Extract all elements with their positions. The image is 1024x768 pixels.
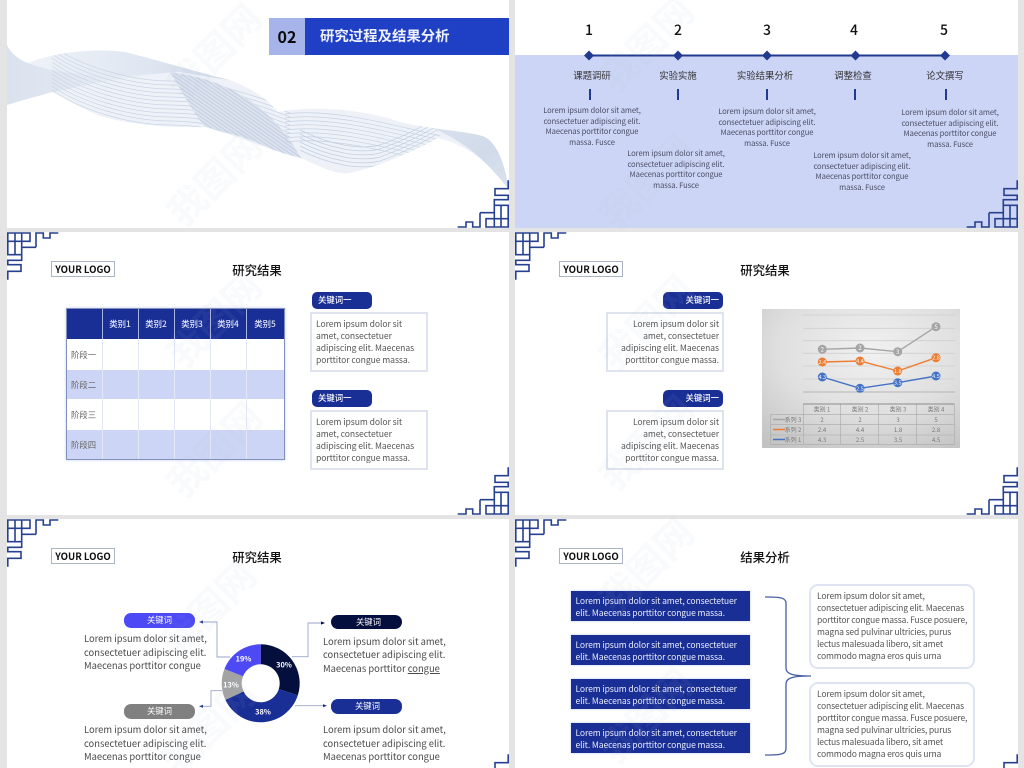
- step 5: Maecenas porttitor congue: [904, 128, 996, 139]
- chart data table labels: 4.5: [932, 435, 940, 444]
- text bar 1: elit. Maecenas porttitor congue massa.: [576, 606, 725, 618]
- step 2: consectetuer adipiscing elit.: [627, 159, 725, 170]
- step 3: Maecenas porttitor congue: [721, 127, 813, 138]
- step 5: consectetuer adipiscing elit.: [901, 118, 999, 129]
- logo: YOUR LOGO: [55, 262, 111, 276]
- text bar 1: Lorem ipsum dolor sit amet, consectetuer: [576, 594, 737, 606]
- heading: 结果分析: [740, 548, 790, 566]
- step 5: 论文撰写: [926, 68, 964, 82]
- series 1 line: [818, 372, 940, 393]
- text bar 2: elit. Maecenas porttitor congue massa.: [576, 650, 725, 662]
- step 4: consectetuer adipiscing elit.: [813, 161, 911, 172]
- series 3 line: 2: [858, 343, 862, 352]
- text bar 3: Lorem ipsum dolor sit amet, consectetuer: [576, 682, 737, 694]
- step 1: massa. Fusce: [569, 137, 615, 148]
- text box 1: adipiscing elit. Maecenas: [621, 342, 719, 354]
- watermarks: 我图网: [147, 547, 266, 666]
- corner ornament: [1003, 754, 1018, 768]
- text box bottom: [809, 682, 975, 767]
- data table: 类别5: [254, 318, 276, 330]
- slide 3: table results: [7, 232, 509, 515]
- text bar 3: [571, 679, 750, 709]
- step 3: consectetuer adipiscing elit.: [718, 117, 816, 128]
- keyword pill: blue: [331, 699, 402, 714]
- series 3 line: 3: [896, 347, 899, 356]
- text box 2: amet, consectetuer: [316, 428, 392, 440]
- text box top: consectetuer adipiscing elit. Maecenas: [817, 602, 964, 614]
- data table: 阶段四: [71, 439, 96, 451]
- series 3 line: 2: [821, 344, 825, 354]
- text box bottom: lectus malesuada libero, sit amet: [817, 736, 943, 748]
- text bar 1: [571, 591, 750, 621]
- text box bottom: consectetuer adipiscing elit. Maecenas: [817, 700, 964, 712]
- corner ornament top left: [515, 232, 566, 280]
- donut chart with connectors: 19%: [236, 654, 251, 665]
- keyword pill 1: [663, 292, 723, 309]
- series 2 line: [818, 353, 940, 376]
- logo: YOUR LOGO: [55, 549, 111, 563]
- step 2: Maecenas porttitor congue: [630, 169, 722, 180]
- text block: blue: [323, 722, 446, 763]
- keyword pill: purple: 关键词: [147, 614, 172, 626]
- keyword pill: gray: [124, 704, 195, 718]
- text bar 4: Lorem ipsum dolor sit amet, consectetuer: [576, 726, 737, 738]
- chart data table labels: 类别 1: [814, 404, 830, 414]
- data table: 阶段三: [71, 408, 96, 420]
- text bar 4: [571, 723, 750, 753]
- section number block: 02: [278, 24, 296, 48]
- data table: 阶段二: [71, 378, 96, 390]
- text block: blue: consectetuer adipiscing elit.: [323, 736, 445, 750]
- slide 4: line chart results: [515, 232, 1018, 515]
- chart data table labels: 4.4: [856, 425, 865, 434]
- keyword pill 1: 关键词一: [318, 294, 352, 306]
- data table: [66, 308, 284, 460]
- series 1 line: 3.5: [894, 379, 902, 387]
- step 5: massa. Fusce: [927, 139, 973, 150]
- keyword pill 1: [312, 292, 372, 309]
- keyword pill 2: [663, 390, 723, 407]
- keyword pill 2: 关键词一: [686, 392, 719, 404]
- keyword pill: blue: 关键词: [355, 700, 380, 712]
- chart data table labels: 4.3: [818, 435, 826, 444]
- step 3: Lorem ipsum dolor sit amet,: [718, 106, 816, 117]
- step 5: [901, 20, 999, 150]
- text block: purple: Lorem ipsum dolor sit amet,: [84, 631, 207, 645]
- step 2: 2: [674, 20, 682, 40]
- chart data table labels: 3.5: [894, 435, 902, 444]
- watermarks: 我图网: [585, 120, 704, 239]
- watermarks: 我图网: [585, 381, 704, 500]
- series 2 line: 2.4: [818, 358, 826, 366]
- text box 1: Lorem ipsum dolor sit: [633, 318, 719, 330]
- text block: blue: Lorem ipsum dolor sit amet,: [323, 722, 446, 736]
- step 4: Maecenas porttitor congue: [816, 171, 908, 182]
- logo: YOUR LOGO: [563, 549, 619, 563]
- timeline axis with diamonds: [584, 50, 950, 60]
- text box top: commodo magna eros quis urna: [817, 650, 941, 662]
- corner ornament: [966, 467, 1018, 515]
- step 1: Maecenas porttitor congue: [546, 126, 638, 137]
- step 3: massa. Fusce: [744, 138, 790, 149]
- keyword pill 1: 关键词一: [686, 294, 719, 306]
- step 2: Lorem ipsum dolor sit amet,: [627, 148, 725, 159]
- text box bottom: magna sed pulvinar ultricies, purus: [817, 724, 951, 736]
- text box 2: adipiscing elit. Maecenas: [316, 440, 414, 452]
- text box 1: Lorem ipsum dolor sit: [316, 318, 402, 330]
- text box top: [809, 584, 975, 669]
- step 4: [813, 20, 911, 193]
- keyword pill 2: [312, 390, 372, 407]
- text block: blue: Maecenas porttitor congue: [323, 749, 440, 763]
- series 2 line: 2.8: [932, 354, 940, 362]
- text box 1: porttitor congue massa.: [625, 354, 719, 366]
- series 3 line: [818, 322, 940, 356]
- text box 2: [606, 410, 724, 470]
- watermarks: 我图网: [585, 261, 704, 380]
- heading: 研究结果: [232, 548, 282, 566]
- keyword pill: purple: [124, 613, 195, 628]
- step 3: [718, 20, 816, 149]
- chart data table labels: [785, 404, 945, 444]
- step 2: massa. Fusce: [653, 180, 699, 191]
- logo: YOUR LOGO: [563, 262, 619, 276]
- text block: navy: Lorem ipsum dolor sit amet,: [323, 634, 446, 648]
- blue background band: [515, 55, 1018, 228]
- text block: navy: consectetuer adipiscing elit.: [323, 647, 445, 661]
- text box bottom: commodo magna eros quis urna: [817, 748, 941, 760]
- chart data table labels: 1.8: [894, 425, 903, 434]
- data table: 类别1: [109, 318, 131, 330]
- watermarks: 我图网: [153, 117, 272, 236]
- section number block: [269, 18, 305, 55]
- chart data table labels: 2: [858, 415, 862, 424]
- text box bottom: Lorem ipsum dolor sit amet,: [817, 688, 925, 700]
- line chart with data table: [762, 309, 960, 448]
- watermarks: 我图网: [585, 504, 704, 623]
- step 4: 4: [850, 20, 858, 40]
- text box top: porttitor congue massa. Fusce posuere,: [817, 614, 967, 626]
- text bar 2: Lorem ipsum dolor sit amet, consectetuer: [576, 638, 737, 650]
- text box 1: amet, consectetuer: [643, 330, 719, 342]
- keyword pill 2: 关键词一: [318, 392, 352, 404]
- text block: purple: [84, 631, 207, 672]
- data table: 类别4: [217, 318, 239, 330]
- donut chart with connectors: 13%: [223, 680, 239, 691]
- series 2 line: 1.8: [894, 367, 902, 375]
- text box bottom: porttitor congue massa. Fusce posuere,: [817, 712, 967, 724]
- section title bar: 研究过程及结果分析: [320, 25, 450, 46]
- chart data table labels: 类别 2: [852, 404, 869, 414]
- keyword pill: gray: 关键词: [147, 705, 172, 717]
- text box top: Lorem ipsum dolor sit amet,: [817, 590, 925, 602]
- text box top: magna sed pulvinar ultricies, purus: [817, 626, 951, 638]
- step 4: Lorem ipsum dolor sit amet,: [813, 150, 911, 161]
- text box 2: Lorem ipsum dolor sit: [316, 416, 402, 428]
- step 4: 调整检查: [834, 68, 872, 82]
- step 1: [543, 20, 641, 148]
- heading: 研究结果: [232, 261, 282, 279]
- step 1: 课题调研: [573, 68, 611, 82]
- corner ornament: [458, 180, 509, 228]
- text box 2: Lorem ipsum dolor sit: [633, 416, 719, 428]
- step 1: Lorem ipsum dolor sit amet,: [543, 105, 641, 116]
- text block: gray: [84, 722, 207, 763]
- text box 2: porttitor congue massa.: [625, 452, 719, 464]
- heading: 研究结果: [740, 261, 790, 279]
- slide 6: result analysis: [515, 519, 1018, 768]
- series 1 line: 4.3: [818, 373, 826, 381]
- corner ornament top left: [7, 519, 58, 567]
- donut chart with connectors: 38%: [255, 707, 271, 718]
- series 2 line: 4.4: [856, 357, 864, 365]
- step 4: massa. Fusce: [839, 182, 885, 193]
- step 5: Lorem ipsum dolor sit amet,: [901, 107, 999, 118]
- text block: gray: Maecenas porttitor congue: [84, 749, 201, 763]
- series 3 line: 5: [934, 322, 938, 331]
- text block: purple: consectetuer adipiscing elit.: [84, 644, 206, 658]
- series 1 line: 4.5: [932, 372, 940, 380]
- corner ornament: [494, 754, 509, 768]
- text block: gray: consectetuer adipiscing elit.: [84, 736, 206, 750]
- series 1 line: 2.5: [856, 384, 864, 392]
- donut chart with connectors: [199, 620, 327, 722]
- slide 5: donut results: [7, 519, 509, 768]
- data table: 类别2: [145, 318, 167, 330]
- step 3: 3: [763, 20, 771, 40]
- corner ornament top left: [7, 232, 58, 280]
- text block: purple: Maecenas porttitor congue: [84, 658, 201, 672]
- text box 2: amet, consectetuer: [643, 428, 719, 440]
- data table: 类别3: [181, 318, 203, 330]
- chart data table labels: 类别 4: [928, 404, 945, 414]
- text box 1: amet, consectetuer: [316, 330, 392, 342]
- text box 1: [606, 312, 724, 372]
- chart data table labels: 5: [934, 415, 938, 424]
- chart data table labels: 系列 1: [785, 435, 801, 444]
- text box 2: adipiscing elit. Maecenas: [621, 440, 719, 452]
- donut chart with connectors: 30%: [276, 660, 292, 671]
- text box top: lectus malesuada libero, sit amet: [817, 638, 943, 650]
- text box 1: porttitor congue massa.: [316, 354, 410, 366]
- keyword pill: navy: 关键词: [356, 616, 381, 628]
- text box 2: porttitor congue massa.: [316, 452, 410, 464]
- slide 1: section cover: [7, 0, 509, 228]
- corner ornament: [458, 467, 509, 515]
- text bar 3: elit. Maecenas porttitor congue massa.: [576, 694, 725, 706]
- chart data table labels: 2: [820, 415, 824, 424]
- step 2: [627, 20, 725, 191]
- watermarks: 我图网: [153, 388, 272, 507]
- chart data table labels: 系列 3: [785, 415, 801, 424]
- watermarks: 我图网: [153, 258, 272, 377]
- brace connector: [765, 596, 811, 756]
- chart data table labels: 3: [896, 415, 900, 424]
- chart data table labels: 2.5: [856, 435, 864, 444]
- step 2: 实验实施: [659, 68, 697, 82]
- corner ornament: [966, 180, 1018, 228]
- text bar 2: [571, 635, 750, 665]
- text block: navy: Maecenas porttitor congue: [323, 660, 440, 674]
- text block: gray: Lorem ipsum dolor sit amet,: [84, 722, 207, 736]
- text box 1: [310, 312, 428, 372]
- text bar 4: elit. Maecenas porttitor congue massa.: [576, 738, 725, 750]
- chart data table labels: 2.8: [932, 425, 941, 434]
- step 3: 实验结果分析: [737, 68, 793, 82]
- section title bar: [305, 18, 509, 55]
- keyword pill: navy: [331, 614, 402, 629]
- chart data table labels: 类别 3: [890, 404, 906, 414]
- step 1: consectetuer adipiscing elit.: [543, 116, 641, 127]
- slide 2: timeline: [515, 0, 1018, 228]
- corner ornament top left: [515, 519, 566, 567]
- text box 1: adipiscing elit. Maecenas: [316, 342, 414, 354]
- text block: navy: [323, 634, 446, 674]
- step 5: 5: [940, 20, 948, 40]
- step 1: 1: [585, 20, 593, 40]
- text box 2: [310, 410, 428, 470]
- data table: 阶段一: [71, 348, 96, 360]
- chart data table labels: 系列 2: [785, 425, 802, 434]
- wave ribbon graphic: [7, 46, 508, 188]
- chart data table labels: 2.4: [818, 425, 827, 434]
